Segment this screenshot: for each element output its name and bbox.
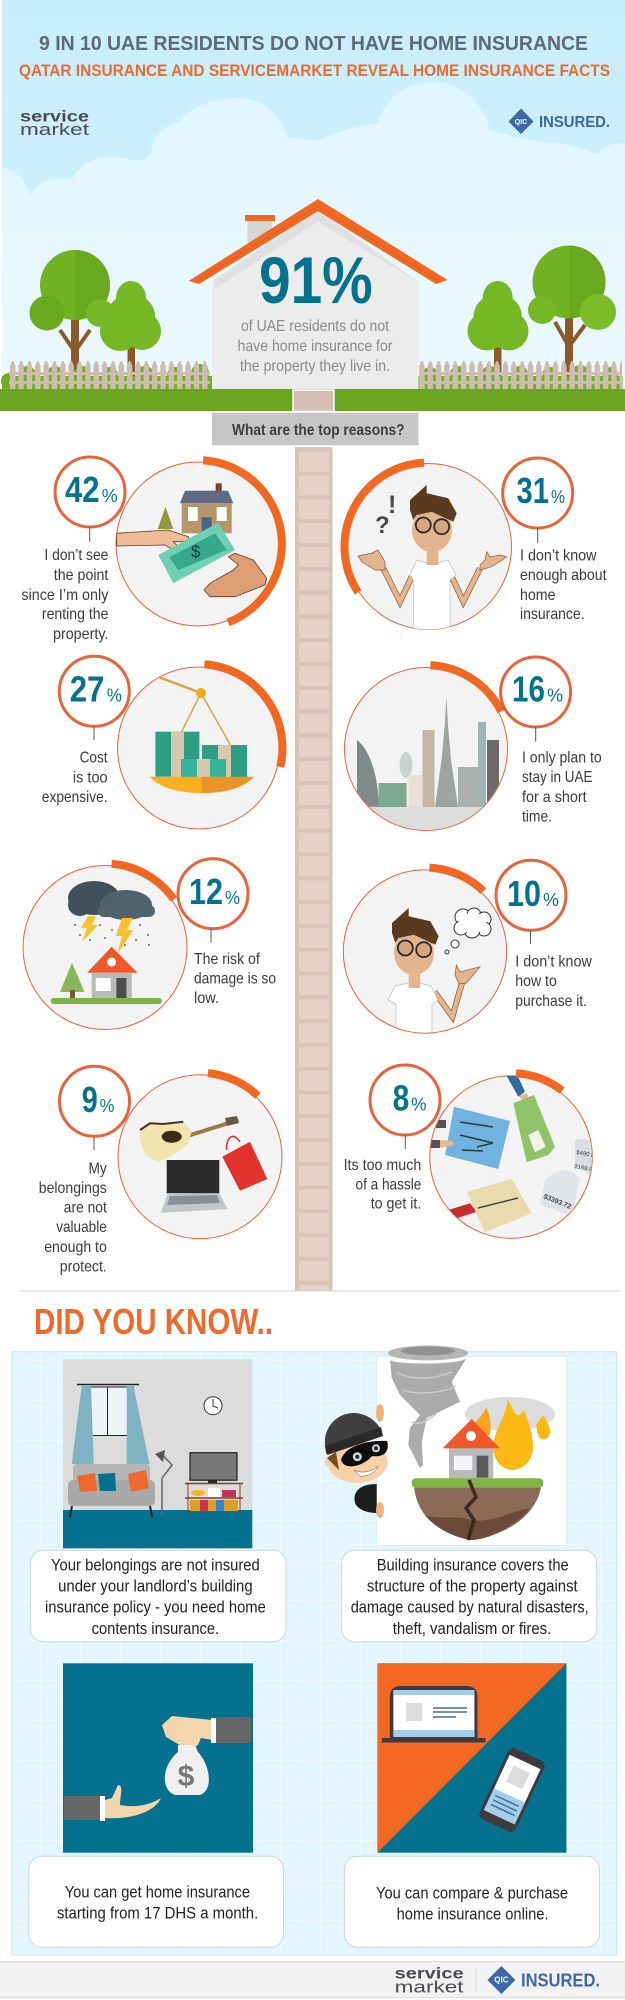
caption: since I’m only xyxy=(21,587,108,604)
caption: time. xyxy=(522,809,552,826)
caption: I don’t know xyxy=(520,548,597,565)
caption xyxy=(522,750,602,826)
card: building insurance: structure of the property against xyxy=(367,1577,578,1596)
footer logo: QIC Insured xyxy=(487,1966,600,1994)
illustration: hands holding paperwork xyxy=(430,1070,600,1232)
reason: 27%: % xyxy=(107,686,122,706)
stat description: the property they live in. xyxy=(240,358,390,375)
fence right with hedge xyxy=(418,361,622,391)
tree left large xyxy=(30,250,114,378)
panel: did you know facts xyxy=(12,1352,617,1955)
logo: QIC Insured: INSURED. xyxy=(539,114,610,131)
reason: 8% xyxy=(344,1065,600,1238)
reason: 10%: % xyxy=(543,890,559,910)
caption: home xyxy=(520,587,556,604)
central brick road xyxy=(295,447,332,1291)
caption: insurance. xyxy=(520,606,585,623)
roof xyxy=(188,199,448,284)
card: compare online xyxy=(344,1856,599,1947)
caption: protect. xyxy=(60,1259,107,1276)
footer logo: servicemarket: service xyxy=(395,1965,464,1982)
reason: 16% xyxy=(340,657,602,837)
illustration: city skyline xyxy=(357,697,499,830)
illustration: hands holding paperwork: $3393.72 xyxy=(542,1193,572,1211)
caption xyxy=(21,547,109,643)
reason: 16%: % xyxy=(547,686,563,706)
tree left small xyxy=(100,281,161,378)
reason: 12%: 12 xyxy=(189,871,223,912)
illustration: hands holding paperwork: $490.80 xyxy=(576,1150,599,1160)
logo: servicemarket: market xyxy=(20,120,89,139)
footer xyxy=(0,1962,625,1998)
reason: 9%: 9 xyxy=(82,1079,98,1120)
caption: damage is so xyxy=(194,971,276,988)
image: risks covered by building insurance xyxy=(325,1346,567,1545)
caption: enough about xyxy=(520,567,607,584)
fire and smoke xyxy=(465,1397,555,1470)
caption: purchase it. xyxy=(515,993,587,1010)
caption: stay in UAE xyxy=(522,769,592,786)
card: building insurance xyxy=(342,1550,597,1642)
card: compare online: You can compare & purchase xyxy=(376,1884,568,1903)
upper hand xyxy=(162,1716,251,1750)
sky background xyxy=(2,0,625,392)
card: belongings: insurance policy - you need home xyxy=(45,1598,266,1617)
caption: belongings xyxy=(39,1180,107,1197)
reason: 27% xyxy=(42,656,282,829)
thief xyxy=(325,1404,388,1518)
phone xyxy=(477,1746,547,1834)
reason: 12%: % xyxy=(225,888,240,908)
card: compare online: home insurance online. xyxy=(397,1904,549,1923)
caption xyxy=(39,1160,107,1276)
house path xyxy=(293,390,334,412)
caption xyxy=(344,1157,421,1213)
card: building insurance: damage caused by natural disasters, xyxy=(351,1598,589,1617)
chimney xyxy=(245,215,275,244)
banner: top reasons: What are the top reasons? xyxy=(232,422,404,439)
caption: low. xyxy=(194,990,219,1007)
illustration: hands holding paperwork: $169.99 xyxy=(574,1164,597,1174)
logo: servicemarket: service xyxy=(20,108,89,126)
caption: renting the xyxy=(42,606,108,623)
illustration: confused man: ! xyxy=(388,491,396,519)
caption: My xyxy=(88,1160,107,1177)
illustration: money on scale xyxy=(150,677,254,793)
card: belongings: Your belongings are not insured xyxy=(51,1556,260,1575)
caption: for a short xyxy=(522,789,587,806)
reason: 9% xyxy=(39,1066,282,1276)
caption xyxy=(520,548,607,623)
reason: 31%: 31 xyxy=(516,470,549,511)
tree right small xyxy=(468,281,528,378)
image: compare online xyxy=(377,1663,566,1853)
card: building insurance: Building insurance covers the xyxy=(377,1556,569,1575)
money bag: $ xyxy=(178,1760,195,1793)
caption: the point xyxy=(54,567,109,584)
clouds xyxy=(2,82,625,392)
card: belongings: under your landlord’s building xyxy=(58,1577,253,1596)
caption: valuable xyxy=(56,1219,107,1236)
image: hands exchanging money bag xyxy=(63,1663,253,1853)
caption: are not xyxy=(64,1200,107,1217)
reason: 42%: 42 xyxy=(65,469,100,510)
card: belongings: contents insurance. xyxy=(92,1619,219,1638)
reason: 9%: % xyxy=(100,1096,114,1116)
stat: 91%: 91% xyxy=(259,243,373,317)
reason: 16%: 16 xyxy=(512,669,545,710)
tornado xyxy=(388,1346,468,1468)
caption: I don’t see xyxy=(44,547,108,564)
image: living room xyxy=(63,1359,252,1548)
laptop xyxy=(382,1686,486,1742)
caption xyxy=(42,750,108,806)
caption: expensive. xyxy=(42,789,108,806)
card: price: starting from 17 DHS a month. xyxy=(57,1903,258,1922)
stat description: have home insurance for xyxy=(238,338,393,355)
reason: 8%: % xyxy=(411,1095,426,1115)
card: belongings xyxy=(31,1550,286,1642)
reason: 12% xyxy=(23,859,276,1030)
illustration: house and money: $ xyxy=(191,542,201,561)
caption: enough to xyxy=(44,1239,107,1256)
illustration: house and money xyxy=(117,483,267,597)
illustration: confused man xyxy=(358,485,507,632)
caption xyxy=(515,954,592,1010)
illustration: thinking man xyxy=(388,908,491,1040)
reason: 42%: % xyxy=(102,486,118,506)
caption: Its too much xyxy=(344,1157,421,1174)
logo: servicemarket xyxy=(20,108,89,139)
caption: property. xyxy=(53,626,108,643)
stat description: of UAE residents do not xyxy=(241,318,389,335)
burning house xyxy=(443,1419,500,1479)
lower hand xyxy=(64,1785,161,1821)
reason: 42% xyxy=(21,457,282,643)
card: price: You can get home insurance xyxy=(65,1882,250,1901)
reason: 31% xyxy=(345,458,607,632)
illustration: guitar, bag and laptop xyxy=(140,1116,267,1213)
footer logo: QIC Insured: INSURED. xyxy=(521,1971,600,1991)
heading: did you know: DID YOU KNOW.. xyxy=(34,1301,273,1342)
reason: 10%: 10 xyxy=(507,873,541,914)
illustration: storm and house xyxy=(51,881,162,1004)
stat description xyxy=(238,318,393,375)
house xyxy=(188,199,448,412)
caption: The risk of xyxy=(194,951,260,968)
caption: I only plan to xyxy=(522,750,602,767)
cracked island xyxy=(412,1478,543,1540)
money bag xyxy=(165,1745,209,1795)
caption: I don’t know xyxy=(515,954,592,971)
card: building insurance: theft, vandalism or fires. xyxy=(393,1619,551,1638)
logo: QIC Insured xyxy=(508,108,610,134)
card: price xyxy=(29,1856,283,1947)
ground xyxy=(0,389,625,411)
caption xyxy=(194,951,276,1007)
tree right large xyxy=(528,246,616,378)
fence left with hedge xyxy=(1,361,212,391)
caption: is too xyxy=(73,770,108,787)
reason: 27%: 27 xyxy=(70,669,104,710)
caption: to get it. xyxy=(371,1196,421,1213)
title: 9 IN 10 UAE RESIDENTS DO NOT HAVE HOME INSURANCE xyxy=(39,33,588,55)
footer logo: QIC Insured: QIC xyxy=(494,1976,509,1984)
illustration: confused man: ? xyxy=(375,512,390,539)
caption: of a hassle xyxy=(356,1176,421,1193)
reason: 10% xyxy=(343,860,592,1040)
caption: Cost xyxy=(80,750,108,767)
caption: how to xyxy=(515,973,557,990)
footer logo: servicemarket: market xyxy=(395,1978,464,1997)
reason: 8%: 8 xyxy=(393,1078,409,1119)
logo: QIC Insured: QIC xyxy=(515,119,527,126)
footer logo: servicemarket xyxy=(395,1965,464,1997)
reason: 31%: % xyxy=(551,487,565,507)
banner: top reasons xyxy=(212,413,418,445)
